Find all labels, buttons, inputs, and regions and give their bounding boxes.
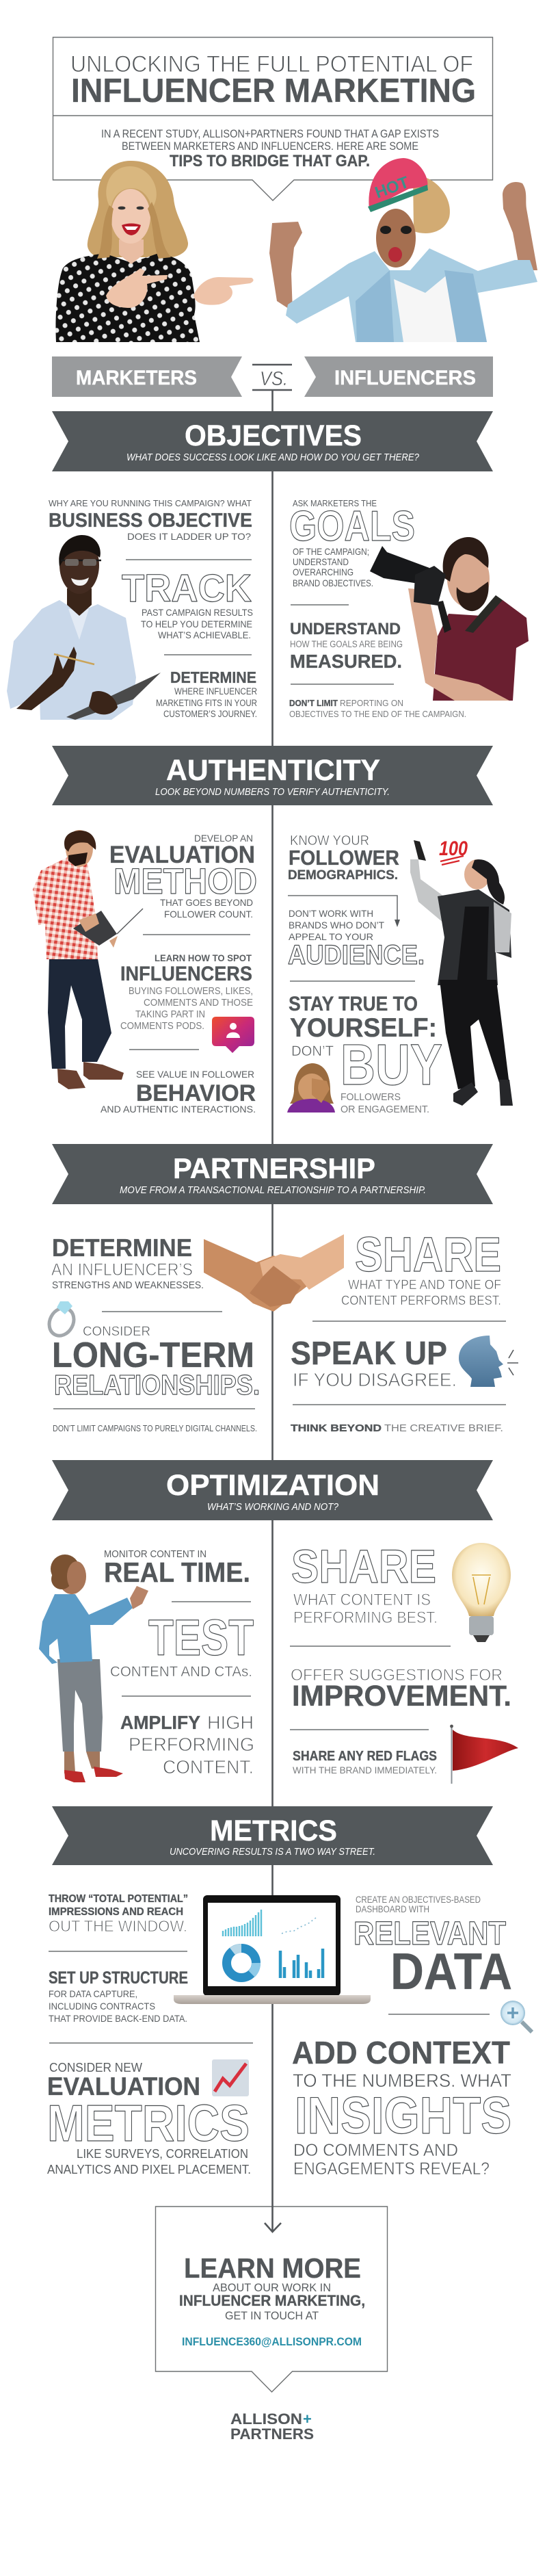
banner: partnership: MOVE FROM A TRANSACTIONAL RELATIONSHIP TO A PARTNERSHIP. — [120, 1184, 426, 1196]
text: think beyond — [291, 1422, 503, 1434]
text: track: WHAT’S ACHIEVABLE. — [158, 629, 251, 640]
icon: diamond ring — [44, 1301, 79, 1340]
text: evaluation metrics: LIKE SURVEYS, CORRELATION — [77, 2147, 248, 2161]
text: stay true to yourself: DON’T — [291, 1043, 334, 1059]
text: throw total potential — [49, 1893, 188, 1935]
banner: optimization — [52, 1460, 493, 1520]
text: speak up: SPEAK UP — [291, 1336, 447, 1372]
text: determine strengths — [51, 1234, 204, 1291]
text: set up structure: INCLUDING CONTRACTS — [49, 2001, 155, 2012]
text: amplify: AMPLIFY — [120, 1712, 200, 1733]
text: goals: OVERARCHING — [293, 567, 353, 577]
text: throw total potential: THROW “TOTAL POTENTIAL” — [49, 1893, 188, 1905]
icon: speaking head — [459, 1336, 518, 1387]
text: throw total potential: IMPRESSIONS AND REACH — [49, 1906, 183, 1918]
text: follower demographics: FOLLOWER — [289, 846, 399, 870]
text: audience: APPEAL TO YOUR — [289, 931, 373, 942]
banner: optimization: WHAT’S WORKING AND NOT? — [207, 1501, 339, 1513]
text: stay true to yourself: OR ENGAGEMENT. — [341, 1104, 429, 1115]
logo: allison+partners: + — [303, 2410, 312, 2428]
text: stay true to yourself: STAY TRUE TO — [289, 993, 418, 1015]
text: track: TO HELP YOU DETERMINE — [141, 619, 252, 629]
icon: facepalm emoji — [287, 1063, 335, 1113]
text: relevant data: DASHBOARD WITH — [356, 1904, 429, 1914]
text: share content: WHAT TYPE AND TONE OF — [348, 1278, 501, 1292]
text: speak up: IF YOU DISAGREE. — [293, 1369, 457, 1390]
versus bar — [52, 356, 493, 397]
text: share what content: PERFORMING BEST. — [293, 1609, 438, 1627]
icon: follower notification — [212, 1017, 254, 1053]
icon: trend chart — [212, 2059, 249, 2096]
text: behavior — [101, 1069, 256, 1115]
title: UNLOCKING THE FULL POTENTIAL OF — [70, 51, 473, 77]
text: red flags: WITH THE BRAND IMMEDIATELY. — [293, 1765, 437, 1775]
text: spot influencers: LEARN HOW TO SPOT — [155, 952, 252, 963]
text: audience — [288, 908, 425, 970]
text: understand measured: UNDERSTAND — [290, 620, 401, 638]
text: don't limit campaigns: DON’T LIMIT CAMPAIGNS TO PURELY DIGITAL CHANNELS. — [53, 1423, 257, 1433]
text: amplify: CONTENT. — [163, 1756, 254, 1778]
text: business objective: BUSINESS OBJECTIVE — [49, 510, 252, 532]
text: spot influencers: COMMENTS AND THOSE — [144, 998, 253, 1009]
text: stay true to yourself: YOURSELF: — [290, 1013, 437, 1043]
photo: handshake — [204, 1234, 344, 1312]
text: understand measured: MEASURED. — [290, 651, 402, 672]
icon: light bulb — [452, 1543, 511, 1642]
text: business objective — [49, 498, 252, 542]
text: evaluation metrics: EVALUATION — [47, 2072, 200, 2100]
banner: authenticity — [52, 746, 493, 805]
text: learn more — [179, 2252, 365, 2348]
text: business objective: WHY ARE YOU RUNNING THIS CAMPAIGN? WHAT — [49, 498, 252, 508]
text: speak up — [291, 1336, 457, 1390]
center timeline arrow — [265, 390, 281, 2232]
text: evaluation method: DEVELOP AN — [194, 833, 253, 844]
text: determine strengths: STRENGTHS AND WEAKNESSES. — [52, 1279, 204, 1291]
text: follower demographics: KNOW YOUR — [290, 833, 369, 848]
text: learn more: GET IN TOUCH AT — [225, 2309, 319, 2322]
text: improvement: IMPROVEMENT. — [292, 1680, 511, 1713]
intro text — [101, 127, 439, 170]
text: learn more: INFLUENCE360@ALLISONPR.COM — [182, 2335, 362, 2348]
text: goals: ASK MARKETERS THE — [293, 498, 377, 508]
text: audience: AUDIENCE. — [288, 940, 425, 970]
influencers label: INFLUENCERS — [334, 367, 476, 389]
marketers label — [52, 356, 242, 397]
logo: allison+partners — [230, 2410, 314, 2443]
text: set up structure: THAT PROVIDE BACK-END DATA. — [49, 2013, 187, 2024]
text: determine: MARKETING FITS IN YOUR — [156, 698, 257, 708]
vs label: VS. — [260, 368, 288, 390]
text: goals: GOALS — [289, 503, 415, 550]
photo: influencer woman flexing: HOT — [373, 173, 412, 203]
chart: grouped bars — [280, 1949, 323, 1978]
text: share what content: SHARE — [291, 1540, 436, 1593]
photo: influencer woman flexing — [269, 158, 537, 342]
intro text: IN A RECENT STUDY, ALLISON+PARTNERS FOUND THAT A GAP EXISTS — [101, 127, 439, 140]
banner: metrics — [52, 1806, 493, 1865]
intro text: BETWEEN MARKETERS AND INFLUENCERS. HERE ARE SOME — [122, 140, 418, 153]
text: share content — [341, 1228, 501, 1308]
text: long-term relationships: LONG-TERM — [52, 1336, 254, 1375]
text: learn more: INFLUENCER MARKETING, — [179, 2292, 365, 2309]
photo: woman taking selfie — [410, 840, 513, 1106]
icon: magnifier — [501, 2001, 532, 2032]
text: determine — [156, 668, 257, 719]
banner: metrics: UNCOVERING RESULTS IS A TWO WAY STREET. — [170, 1846, 375, 1858]
text: don't limit reporting: OBJECTIVES TO THE END OF THE CAMPAIGN. — [289, 709, 466, 719]
text: follower demographics: DEMOGRAPHICS. — [288, 868, 398, 883]
icon: 100 emoji: 100 — [439, 837, 468, 860]
text: amplify — [120, 1712, 254, 1778]
chart: scatter — [282, 1918, 316, 1934]
text: share what content — [291, 1540, 438, 1627]
text: improvement: OFFER SUGGESTIONS FOR — [291, 1666, 503, 1684]
text: evaluation method: EVALUATION — [109, 842, 255, 868]
text: test: CONTENT AND CTAs. — [110, 1664, 252, 1680]
text: goals: BRAND OBJECTIVES. — [293, 577, 373, 588]
text: understand measured: HOW THE GOALS ARE BEING — [290, 639, 403, 649]
text: determine strengths: AN INFLUENCER’S — [51, 1260, 193, 1279]
laptop with dashboard — [174, 1895, 371, 2004]
text: set up structure — [49, 1968, 188, 2024]
chart: donut — [227, 1949, 256, 1977]
text: evaluation method — [109, 833, 257, 920]
text: evaluation method: FOLLOWER COUNT. — [164, 909, 253, 920]
text: long-term relationships: CONSIDER — [83, 1325, 150, 1339]
text: spot influencers: TAKING PART IN — [135, 1009, 205, 1020]
text: goals: OF THE CAMPAIGN; — [293, 546, 369, 557]
text: goals: UNDERSTAND — [293, 556, 349, 567]
text: spot influencers: COMMENTS PODS. — [120, 1021, 204, 1032]
text: determine: CUSTOMER’S JOURNEY. — [163, 709, 257, 719]
text: stay true to yourself — [289, 993, 442, 1115]
text: behavior: SEE VALUE IN FOLLOWER — [136, 1069, 254, 1080]
photo: photographer — [370, 537, 529, 701]
text: spot influencers: BUYING FOLLOWERS, LIKES, — [129, 986, 253, 997]
text: follower demographics — [288, 833, 399, 883]
text: evaluation metrics: ANALYTICS AND PIXEL PLACEMENT. — [47, 2163, 251, 2176]
marketers label: MARKETERS — [76, 367, 197, 389]
text: behavior: BEHAVIOR — [136, 1080, 256, 1106]
text: track — [122, 567, 253, 640]
banner: partnership — [52, 1144, 493, 1204]
text: amplify: PERFORMING — [129, 1734, 254, 1755]
text: test — [110, 1609, 254, 1680]
text: long-term relationships — [52, 1325, 260, 1401]
text: spot influencers: INFLUENCERS — [120, 963, 252, 985]
text: share content: CONTENT PERFORMS BEST. — [341, 1294, 501, 1308]
text: evaluation method: METHOD — [114, 861, 257, 902]
text: relevant data: DATA — [390, 1942, 512, 2000]
banner: partnership: PARTNERSHIP — [173, 1152, 375, 1184]
text: real time: REAL TIME. — [104, 1557, 250, 1588]
text: add context insights: INSIGHTS — [295, 2087, 511, 2145]
banner: objectives — [52, 411, 493, 471]
text: amplify: HIGH — [207, 1712, 254, 1733]
text: audience: DON’T WORK WITH — [289, 908, 373, 919]
logo: allison+partners: ALLISON — [230, 2410, 302, 2428]
text: set up structure: SET UP STRUCTURE — [49, 1968, 188, 1988]
title: INFLUENCER MARKETING — [71, 73, 476, 109]
text: business objective: DOES IT LADDER UP TO? — [127, 531, 251, 542]
text: determine: DETERMINE — [170, 668, 256, 686]
text: track: PAST CAMPAIGN RESULTS — [142, 607, 253, 618]
text: relevant data: RELEVANT — [353, 1916, 506, 1952]
influencers label — [304, 356, 493, 397]
photo: man with laptop — [33, 830, 143, 1089]
text: evaluation method: THAT GOES BEYOND — [160, 897, 253, 908]
text: stay true to yourself: BUY — [341, 1032, 442, 1097]
text: add context insights: ADD CONTEXT — [292, 2035, 510, 2070]
text: add context insights: DO COMMENTS AND — [293, 2141, 458, 2160]
header speech box — [53, 37, 493, 200]
text: audience: BRANDS WHO DON’T — [289, 920, 384, 931]
text: evaluation metrics — [47, 2061, 251, 2176]
text: relevant data: CREATE AN OBJECTIVES-BASED — [356, 1895, 481, 1905]
banner: objectives: WHAT DOES SUCCESS LOOK LIKE AND HOW DO YOU GET THERE? — [126, 452, 420, 463]
text: evaluation metrics: CONSIDER NEW — [49, 2061, 142, 2074]
text: relevant data — [353, 1895, 512, 2000]
text: don't limit reporting: DON’T LIMIT — [289, 698, 338, 708]
text: long-term relationships: RELATIONSHIPS. — [54, 1369, 260, 1401]
banner: metrics: METRICS — [210, 1814, 337, 1847]
text: think beyond: THE CREATIVE BRIEF. — [384, 1422, 503, 1434]
text: test: TEST — [148, 1609, 254, 1666]
text: goals — [289, 498, 415, 588]
text: learn more: LEARN MORE — [184, 2252, 361, 2284]
photo: woman pointing — [39, 1554, 148, 1782]
text: improvement — [291, 1666, 511, 1713]
text: behavior: AND AUTHENTIC INTERACTIONS. — [101, 1104, 256, 1115]
text: throw total potential: OUT THE WINDOW. — [49, 1917, 187, 1935]
title — [70, 51, 476, 109]
vs label — [252, 365, 292, 390]
icon: red flag — [450, 1725, 518, 1784]
text: evaluation metrics: METRICS — [47, 2094, 250, 2152]
text: add context insights — [292, 2035, 511, 2178]
logo: allison+partners: PARTNERS — [230, 2425, 314, 2443]
text: real time: MONITOR CONTENT IN — [104, 1549, 206, 1560]
text: track: TRACK — [122, 567, 252, 610]
text: determine strengths: DETERMINE — [52, 1234, 192, 1262]
banner: authenticity: LOOK BEYOND NUMBERS TO VERIFY AUTHENTICITY. — [155, 786, 390, 798]
text: share content: SHARE — [355, 1228, 501, 1282]
chart: bars — [223, 1910, 261, 1936]
photo: man with clipboard — [7, 535, 161, 720]
photo: marketer woman pointing — [55, 161, 254, 342]
arrow: demographics to audience — [288, 896, 400, 927]
banner: optimization: OPTIMIZATION — [166, 1469, 379, 1502]
text: share what content: WHAT CONTENT IS — [293, 1591, 431, 1609]
text: don't limit reporting — [289, 698, 466, 719]
banner: authenticity: AUTHENTICITY — [166, 754, 380, 787]
callout box: learn more frame — [156, 2207, 387, 2392]
text: understand measured — [290, 620, 403, 672]
text: add context insights: TO THE NUMBERS. WHAT — [293, 2070, 511, 2091]
text: add context insights: ENGAGEMENTS REVEAL? — [293, 2159, 490, 2178]
intro text: TIPS TO BRIDGE THAT GAP. — [170, 152, 370, 170]
text: red flags — [293, 1749, 437, 1775]
text: don't limit reporting: REPORTING ON — [340, 698, 403, 708]
text: stay true to yourself: FOLLOWERS — [341, 1092, 401, 1103]
text: spot influencers — [120, 952, 253, 1032]
text: learn more: ABOUT OUR WORK IN — [213, 2281, 331, 2294]
text: set up structure: FOR DATA CAPTURE, — [49, 1988, 137, 1999]
text: think beyond: THINK BEYOND — [291, 1422, 382, 1434]
text: red flags: SHARE ANY RED FLAGS — [293, 1749, 437, 1764]
text: determine: WHERE INFLUENCER — [174, 686, 257, 697]
banner: objectives: OBJECTIVES — [185, 419, 362, 452]
